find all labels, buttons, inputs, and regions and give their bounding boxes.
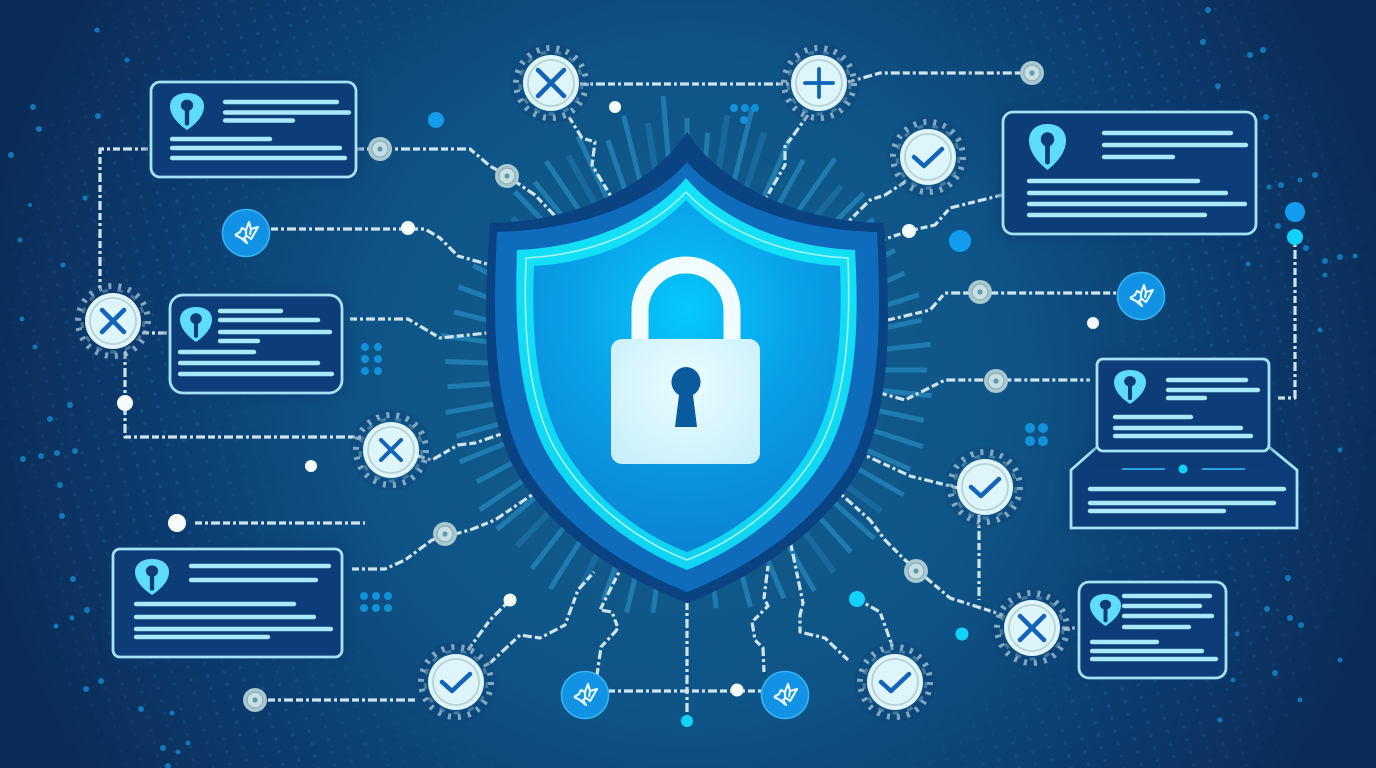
lock body [611, 339, 760, 464]
panel: middle left card [170, 295, 342, 393]
shield [486, 132, 888, 603]
dot cluster bottom left [360, 592, 392, 612]
badge: check right [950, 452, 1020, 522]
badge: x left [78, 286, 148, 356]
badge: check upper right [893, 122, 963, 192]
text lines [1029, 133, 1246, 215]
badge: x lower left [356, 415, 426, 485]
blue icon: left [222, 210, 270, 256]
shield outer edge [486, 132, 888, 603]
ring nodes [243, 61, 1044, 712]
keyhole [671, 367, 701, 427]
dot cluster top [730, 104, 759, 124]
badge: plus top [784, 48, 854, 118]
base dot [1178, 464, 1188, 474]
cyan dots [681, 229, 1303, 727]
blue icon: bottom right [762, 672, 808, 718]
text lines [172, 102, 349, 158]
screen lines [1115, 380, 1258, 436]
text lines [136, 566, 331, 637]
badge: x top [516, 48, 586, 118]
base divider [1122, 468, 1245, 470]
icon: keyhole [1029, 124, 1066, 170]
icon: keyhole [1090, 594, 1121, 626]
badge: check bottom left [421, 647, 491, 717]
panel: bottom right card [1079, 582, 1226, 678]
icon: keyhole [180, 307, 212, 342]
base lines [1090, 489, 1284, 511]
lock shackle [640, 265, 732, 342]
dashed network connectors [100, 73, 1295, 716]
blue icon: right [1118, 272, 1164, 320]
icon: keyhole [135, 559, 169, 595]
text lines [180, 311, 332, 374]
icon: keyhole [170, 93, 204, 130]
shield mid layer [495, 162, 879, 592]
icon: keyhole [1114, 370, 1146, 404]
ring highlight [525, 192, 849, 560]
panel: top left card [151, 82, 356, 177]
dot cluster right [1025, 423, 1048, 446]
laptop base [1071, 447, 1297, 528]
blue dots [428, 112, 1305, 252]
panel: laptop card [1071, 359, 1297, 528]
white dots [117, 101, 1099, 696]
blue icon: bottom left [562, 672, 608, 718]
badge: x lower right [997, 593, 1067, 663]
dot cluster left [361, 343, 382, 375]
radial light rays behind shield [441, 96, 932, 613]
text lines [1092, 596, 1216, 659]
cyan glowing ring [516, 178, 857, 570]
badge: check bottom right [860, 647, 930, 717]
padlock [611, 265, 760, 464]
shield inner field [533, 200, 841, 552]
panel: top right card [1003, 112, 1256, 234]
laptop screen [1097, 359, 1269, 451]
panel: bottom left card [113, 549, 342, 657]
